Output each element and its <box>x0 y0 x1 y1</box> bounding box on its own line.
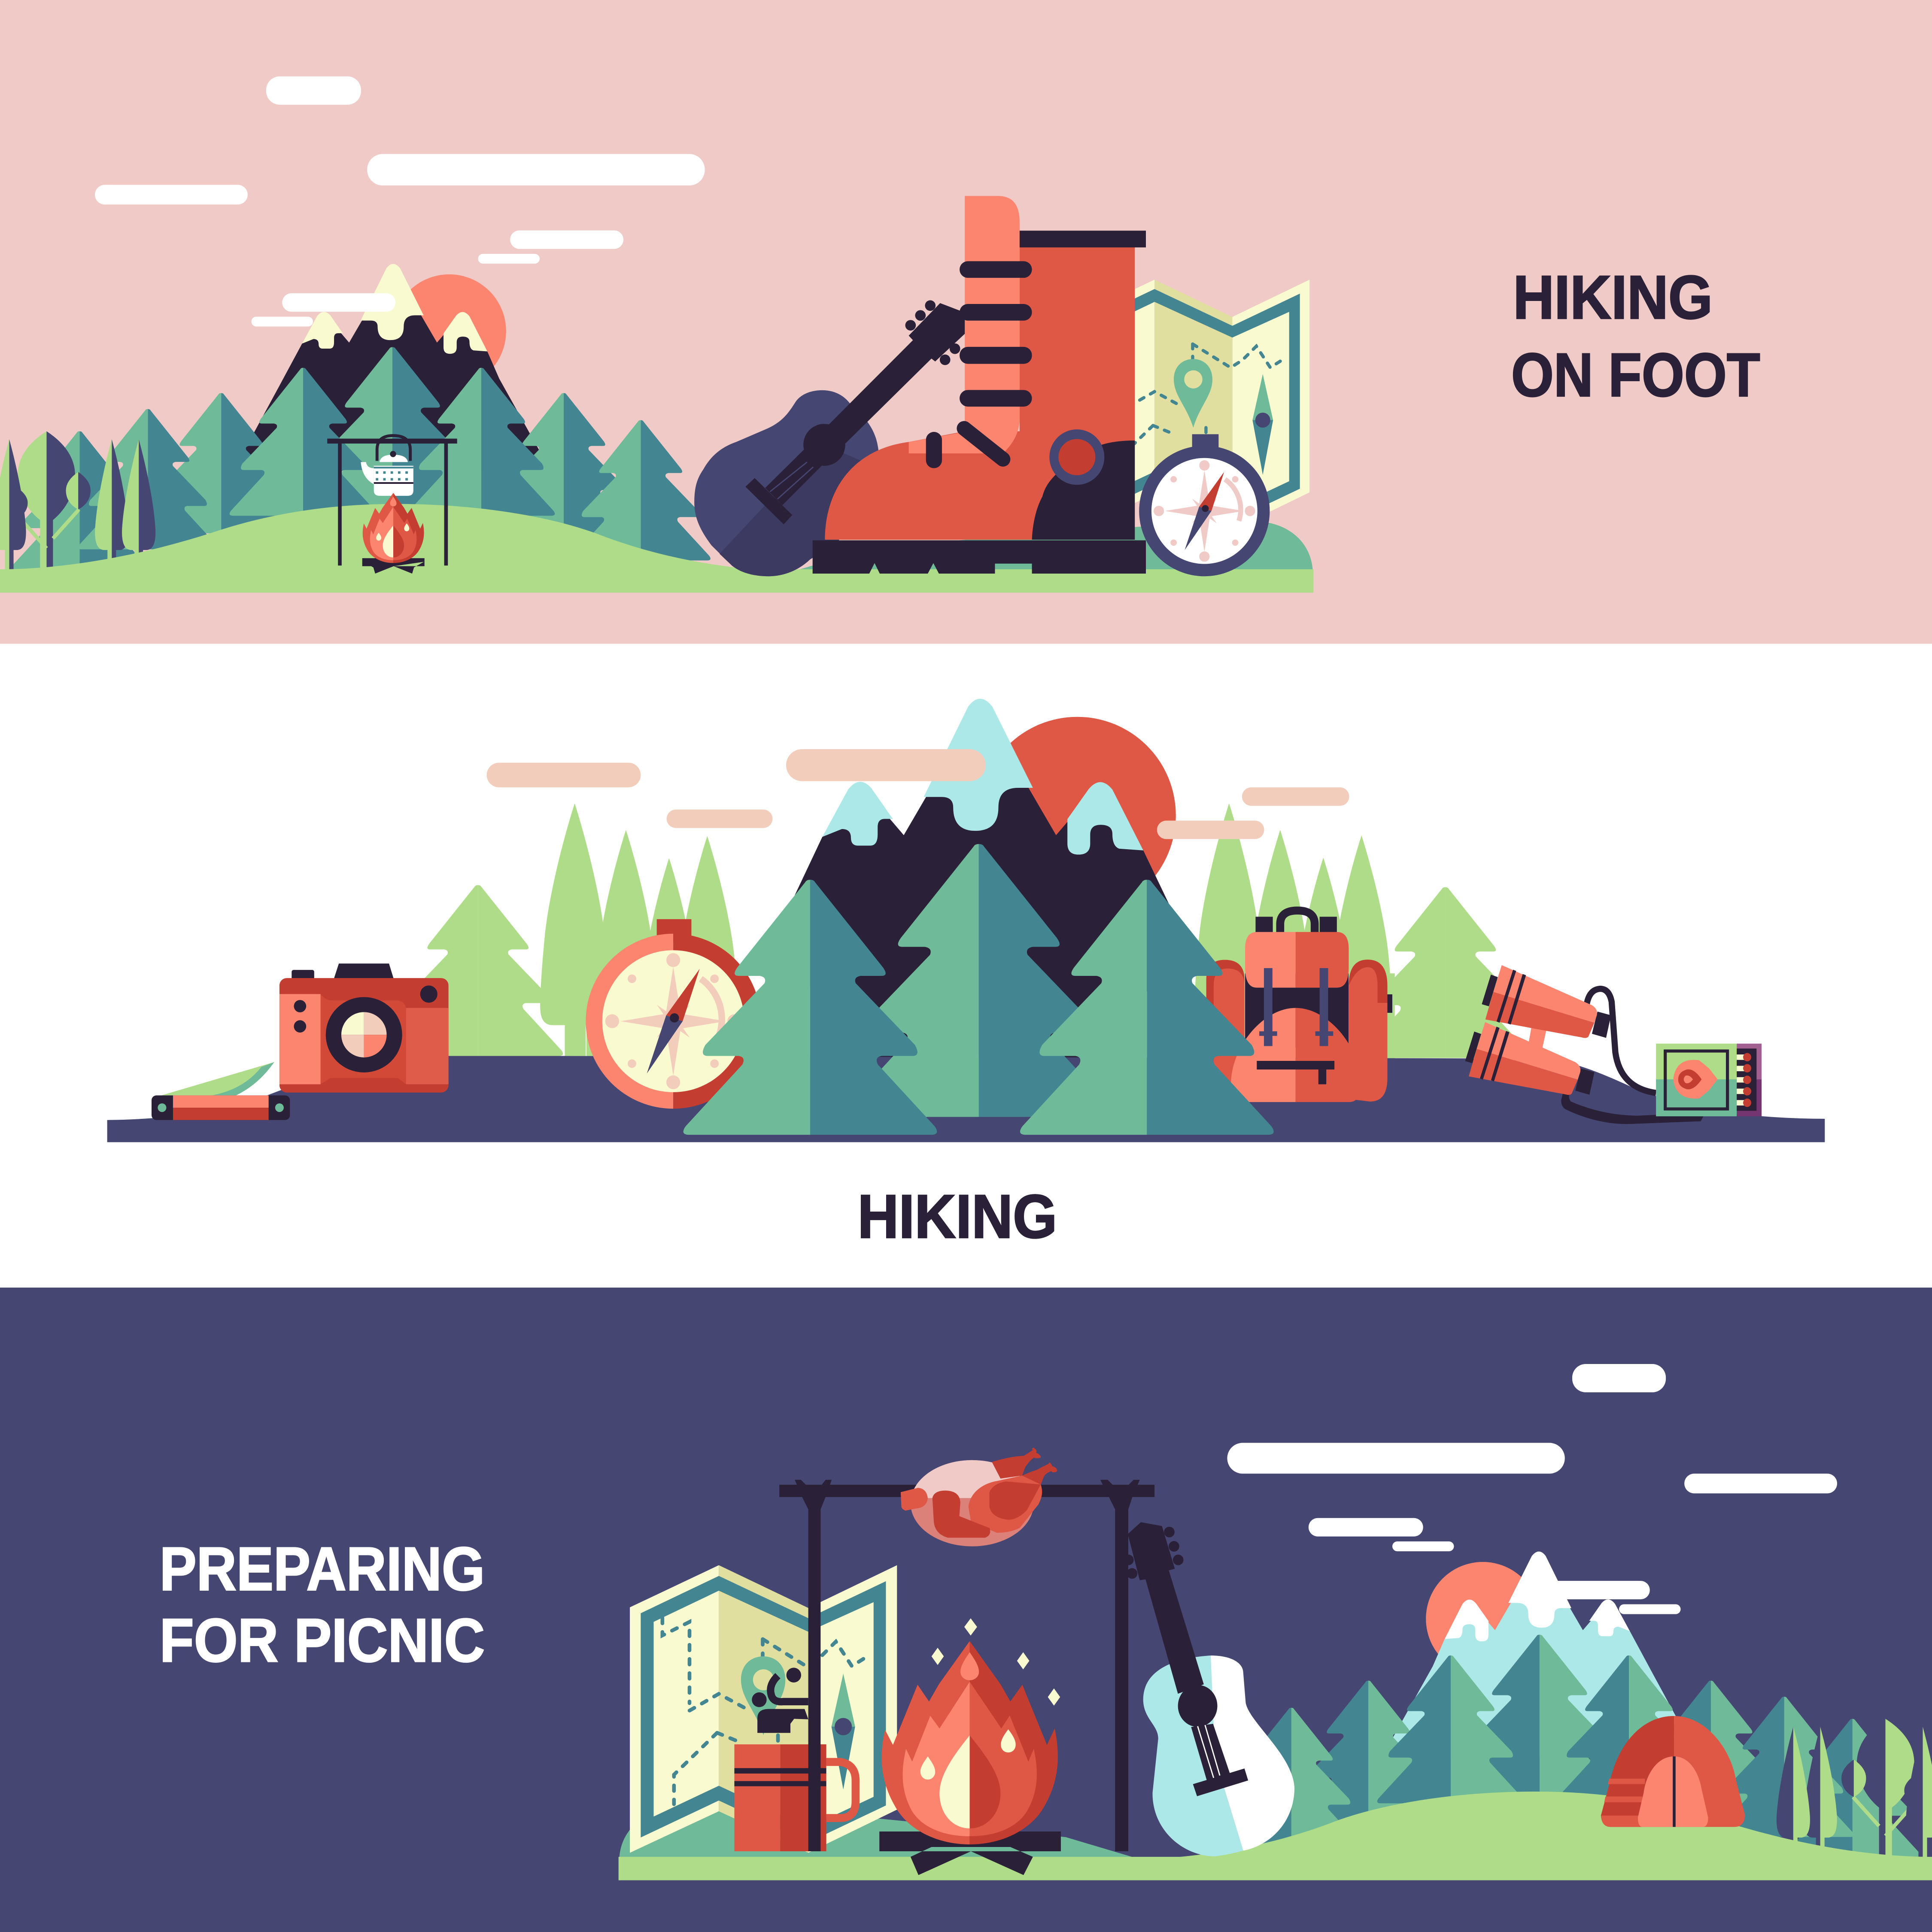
navy background <box>0 1288 1932 1932</box>
sun and mountain <box>234 264 550 470</box>
icon: pocket knife <box>152 1062 290 1120</box>
heading: hiking on foot: ON FOOT <box>1511 341 1760 410</box>
panel: preparing for picnic <box>0 1288 1932 1932</box>
forest and hill landscape <box>619 1634 1932 1880</box>
icon: camera <box>279 963 449 1093</box>
forest and hill landscape <box>0 347 1313 592</box>
clouds <box>95 76 705 327</box>
pink background <box>0 0 1932 644</box>
icon: binoculars <box>1465 965 1705 1124</box>
panel: hiking <box>0 644 1932 1288</box>
background lime trees <box>393 803 1530 1063</box>
navy ground <box>107 1056 1825 1142</box>
icon: matchbox <box>1656 1044 1762 1116</box>
heading: preparing for picnic: FOR PICNIC <box>160 1606 485 1675</box>
icon: guitar <box>694 300 966 576</box>
icon: roasting spit with turkey <box>779 1448 1154 1851</box>
icon: map <box>1077 279 1309 530</box>
clouds <box>487 749 1349 839</box>
heading: hiking on foot <box>1511 263 1760 410</box>
icon: compass <box>1139 434 1270 576</box>
sun and mountain <box>1382 1552 1698 1757</box>
panel: hiking on foot <box>0 0 1932 644</box>
icon: steaming mug <box>734 1668 856 1851</box>
icon: compass <box>586 919 761 1109</box>
icon: campfire <box>879 1618 1061 1875</box>
heading: hiking on foot: HIKING <box>1513 263 1713 332</box>
icon: map <box>630 1565 897 1853</box>
sun and mountain <box>777 699 1183 1080</box>
white background <box>0 644 1932 1288</box>
icon: backpack <box>1206 911 1392 1102</box>
heading: preparing for picnic <box>160 1535 485 1675</box>
clouds <box>1227 1364 1837 1614</box>
icon: guitar <box>1123 1522 1294 1856</box>
icon: campfire <box>362 493 425 574</box>
heading: hiking: HIKING <box>857 1182 1057 1251</box>
icon: boot <box>813 196 1146 574</box>
heading: preparing for picnic: PREPARING <box>160 1535 485 1604</box>
main trees <box>683 844 1274 1135</box>
icon: tripod with kettle <box>327 436 457 565</box>
icon: tent <box>1601 1716 1745 1827</box>
